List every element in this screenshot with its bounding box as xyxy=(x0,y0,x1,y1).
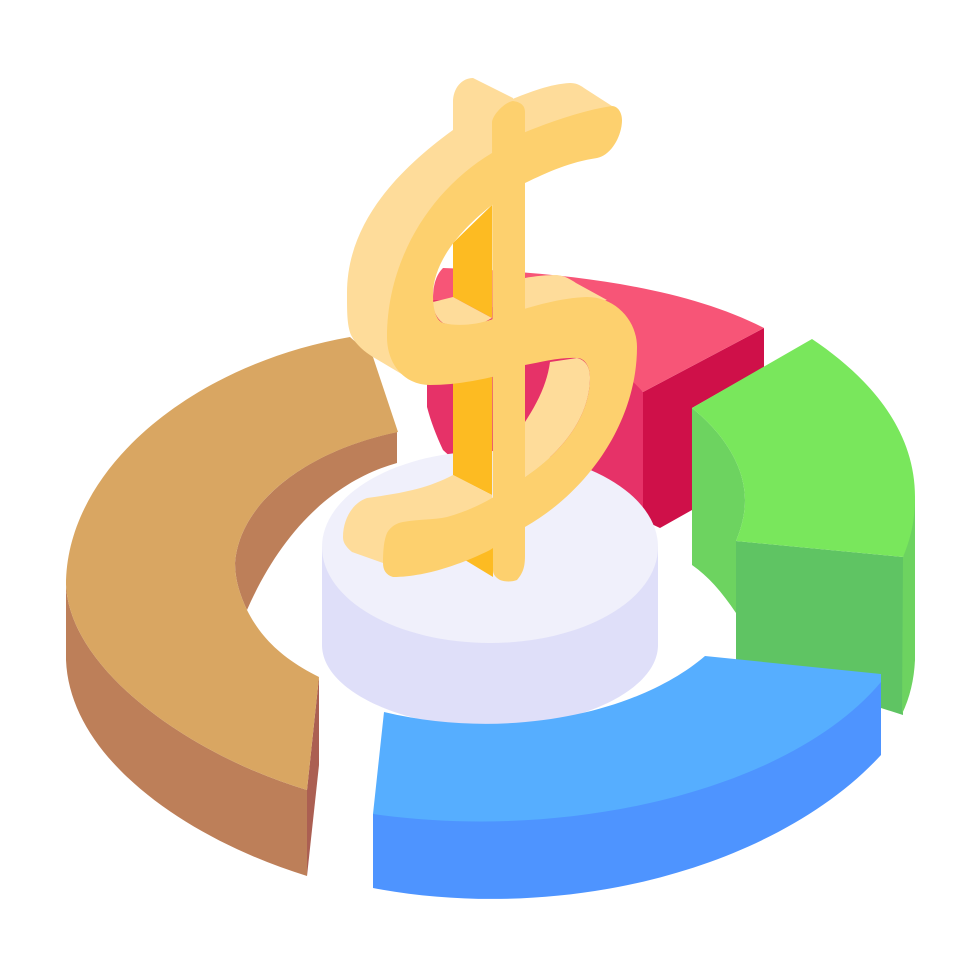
segment: red xyxy=(427,268,764,528)
dollar: front S curve xyxy=(383,106,637,577)
segment: tan xyxy=(66,337,398,876)
dollar: light back side xyxy=(343,78,612,563)
dollar: front vertical bar xyxy=(492,101,525,582)
segment: blue xyxy=(373,656,881,899)
segment: green xyxy=(692,339,915,715)
icon: dollar sign xyxy=(343,78,637,582)
cylinder pedestal xyxy=(322,451,658,727)
dollar: gold inner bar xyxy=(453,205,493,577)
